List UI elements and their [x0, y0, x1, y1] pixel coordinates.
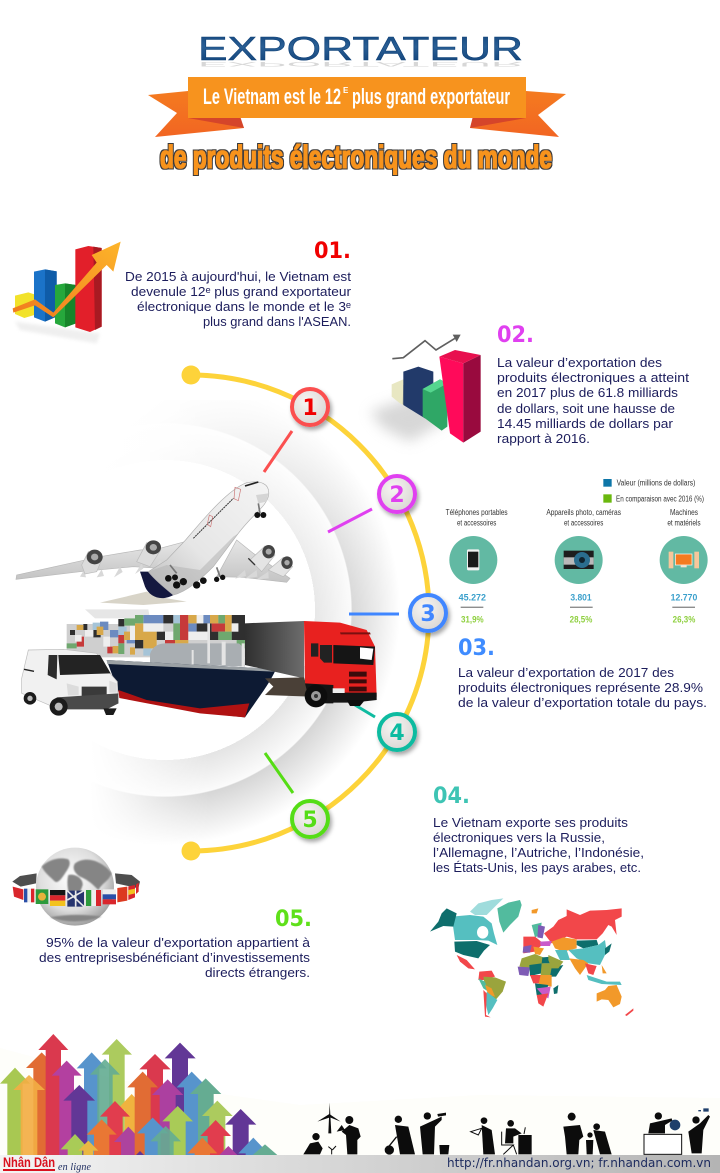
green bar	[423, 379, 447, 431]
yellow bar	[15, 292, 34, 318]
truck	[245, 621, 377, 707]
numbered markers	[292, 389, 446, 837]
south america	[478, 971, 506, 1017]
text 02: produits électroniques a atteint	[497, 371, 690, 385]
soft shadows	[370, 392, 447, 442]
ribbon right tail	[470, 91, 566, 137]
people: teacher and student	[644, 1108, 710, 1154]
banner text: Le Vietnam est le 12	[203, 84, 341, 109]
icon: globe with flags	[12, 848, 140, 926]
text 05	[39, 936, 310, 980]
section 02	[497, 323, 690, 446]
orange arrow	[13, 242, 121, 317]
africa	[518, 954, 563, 1007]
north america	[430, 898, 522, 969]
text 02: rapport à 2016.	[497, 432, 590, 446]
category: cameras: 3.801	[570, 593, 592, 603]
heading 04: 04.	[433, 784, 470, 809]
asia	[548, 937, 622, 985]
footer band	[0, 1154, 720, 1173]
category: phones	[446, 508, 508, 625]
europe and russia	[523, 908, 622, 955]
text 03: La valeur d’exportation de 2017 des	[458, 666, 674, 680]
ribbon right fold	[470, 116, 526, 128]
text 04: Le Vietnam exporte ses produits	[433, 816, 628, 830]
marker 5: 5	[302, 808, 318, 833]
transport illustration: plane, ship, truck, van	[16, 482, 377, 717]
text 01: De 2015 à aujourd'hui, le Vietnam est	[125, 270, 352, 284]
flags	[13, 883, 139, 907]
pink bar	[439, 357, 463, 443]
text 04: les États-Unis, les pays arabes, etc.	[433, 860, 641, 875]
category: cameras: Appareils photo, caméras	[546, 508, 621, 517]
text 05: directs étrangers.	[205, 966, 310, 980]
text 03	[458, 666, 707, 710]
text 04: l’Allemagne, l’Autriche, l’Indonésie,	[433, 846, 644, 860]
globe	[36, 848, 114, 926]
logo: Nhan Dan: Nhân Dân	[3, 1154, 55, 1170]
category: cameras: 28,5%	[570, 615, 592, 625]
section 05	[39, 907, 312, 980]
orange banner	[188, 77, 526, 118]
banner text: plus grand exportateur	[352, 84, 510, 109]
marker 2: 2	[389, 483, 405, 508]
flag ring back	[12, 873, 140, 888]
banner text: E	[343, 86, 349, 95]
beige bar	[392, 379, 410, 408]
trend arrow head	[453, 335, 461, 342]
category: phones: Téléphones portables	[446, 508, 508, 517]
marker 3: 3	[420, 602, 436, 627]
heading 01: 01.	[314, 239, 351, 264]
category: machines: et matériels	[667, 518, 701, 527]
ship hull	[107, 660, 276, 717]
people: family	[563, 1113, 612, 1154]
text 02	[497, 356, 690, 446]
marker 2	[379, 476, 415, 512]
logo: Nhan Dan: en ligne	[58, 1162, 92, 1173]
heading 05: 05.	[275, 907, 312, 932]
people: gardening and wind turbine	[303, 1103, 361, 1154]
title: EXPORTATEUR: EXPORTATEUR	[198, 30, 523, 67]
ship deck housing	[150, 643, 245, 667]
section 04	[433, 784, 644, 875]
icon: 3D bar chart	[370, 335, 481, 443]
concentric shadow rings	[0, 400, 430, 870]
category: phones: 31,9%	[461, 615, 484, 625]
marker 3	[410, 595, 446, 631]
category: cameras: et accessoires	[564, 518, 603, 527]
marker 4: 4	[389, 721, 405, 746]
legend: Valeur (millions de dollars)	[617, 479, 696, 488]
red bar	[75, 246, 102, 332]
legend	[603, 479, 704, 503]
colourful rising arrows	[0, 1034, 277, 1155]
people: reading and computer	[471, 1117, 532, 1154]
chart reflection	[15, 322, 100, 343]
category: machines	[660, 508, 708, 625]
trend line	[392, 338, 455, 359]
text 03: produits électroniques représente 28.9%	[458, 681, 703, 695]
heading 03: 03.	[458, 636, 495, 661]
oceania	[597, 985, 633, 1016]
spoke lines	[264, 431, 399, 793]
logo: Nhan Dan	[3, 1154, 92, 1173]
blue bar	[34, 269, 57, 322]
text 03: de la valeur d’exportation totale du pays.	[458, 696, 707, 710]
navy bar	[403, 367, 433, 418]
marker 1	[292, 389, 328, 425]
title block	[148, 30, 566, 175]
yellow arc timeline	[182, 366, 429, 860]
category: phones: 45.272	[459, 593, 486, 603]
section 01	[125, 239, 352, 329]
banner text	[203, 84, 510, 109]
panel: export categories	[446, 479, 708, 625]
title reflection: EXPORTATEUR	[198, 60, 523, 68]
ribbon left tail	[148, 91, 244, 137]
marker 1: 1	[302, 396, 318, 421]
section 03	[458, 636, 707, 710]
ship superstructure top	[85, 609, 150, 618]
text 02: 14.45 milliards de dollars par	[497, 417, 673, 431]
text 01: électronique dans le monde et le 3ᵉ	[137, 300, 351, 314]
category: machines: 26,3%	[673, 615, 695, 625]
people: housework	[385, 1112, 449, 1155]
icon: rising bar chart with arrow	[13, 242, 121, 343]
category: machines: 12.770	[671, 593, 697, 603]
bottom cream slope	[0, 1048, 720, 1155]
plane	[16, 482, 293, 605]
category: cameras	[546, 508, 621, 625]
marker 4	[379, 714, 415, 750]
text 05: des entreprisesbénéficiant d’investissements	[39, 951, 310, 965]
text 02: La valeur d’exportation des	[497, 356, 662, 370]
text 01: plus grand dans l'ASEAN.	[203, 315, 351, 329]
text 01	[125, 270, 352, 329]
text 05: 95% de la valeur d'exportation appartient à	[46, 936, 310, 950]
text 02: en 2017 plus de 61.8 milliards	[497, 386, 678, 400]
marker 5	[292, 801, 328, 837]
text 02: de dollars, soit une hausse de	[497, 402, 675, 416]
ribbon left fold	[188, 116, 244, 128]
people silhouettes	[303, 1103, 710, 1155]
text 04: électroniques vers la Russie,	[433, 831, 605, 845]
green bar	[55, 283, 76, 327]
heading 02: 02.	[497, 323, 534, 348]
category: machines: Machines	[670, 508, 698, 517]
text 04	[433, 816, 644, 875]
van	[22, 649, 118, 716]
containers	[67, 615, 245, 657]
subtitle: de produits électroniques du monde	[160, 139, 552, 175]
category: phones: et accessoires	[457, 518, 496, 527]
world map	[430, 898, 633, 1017]
text 01: devenule 12ᵉ plus grand exportateur	[131, 285, 351, 299]
website url: http://fr.nhandan.org.vn; fr.nhandan.com.vn	[447, 1156, 711, 1170]
